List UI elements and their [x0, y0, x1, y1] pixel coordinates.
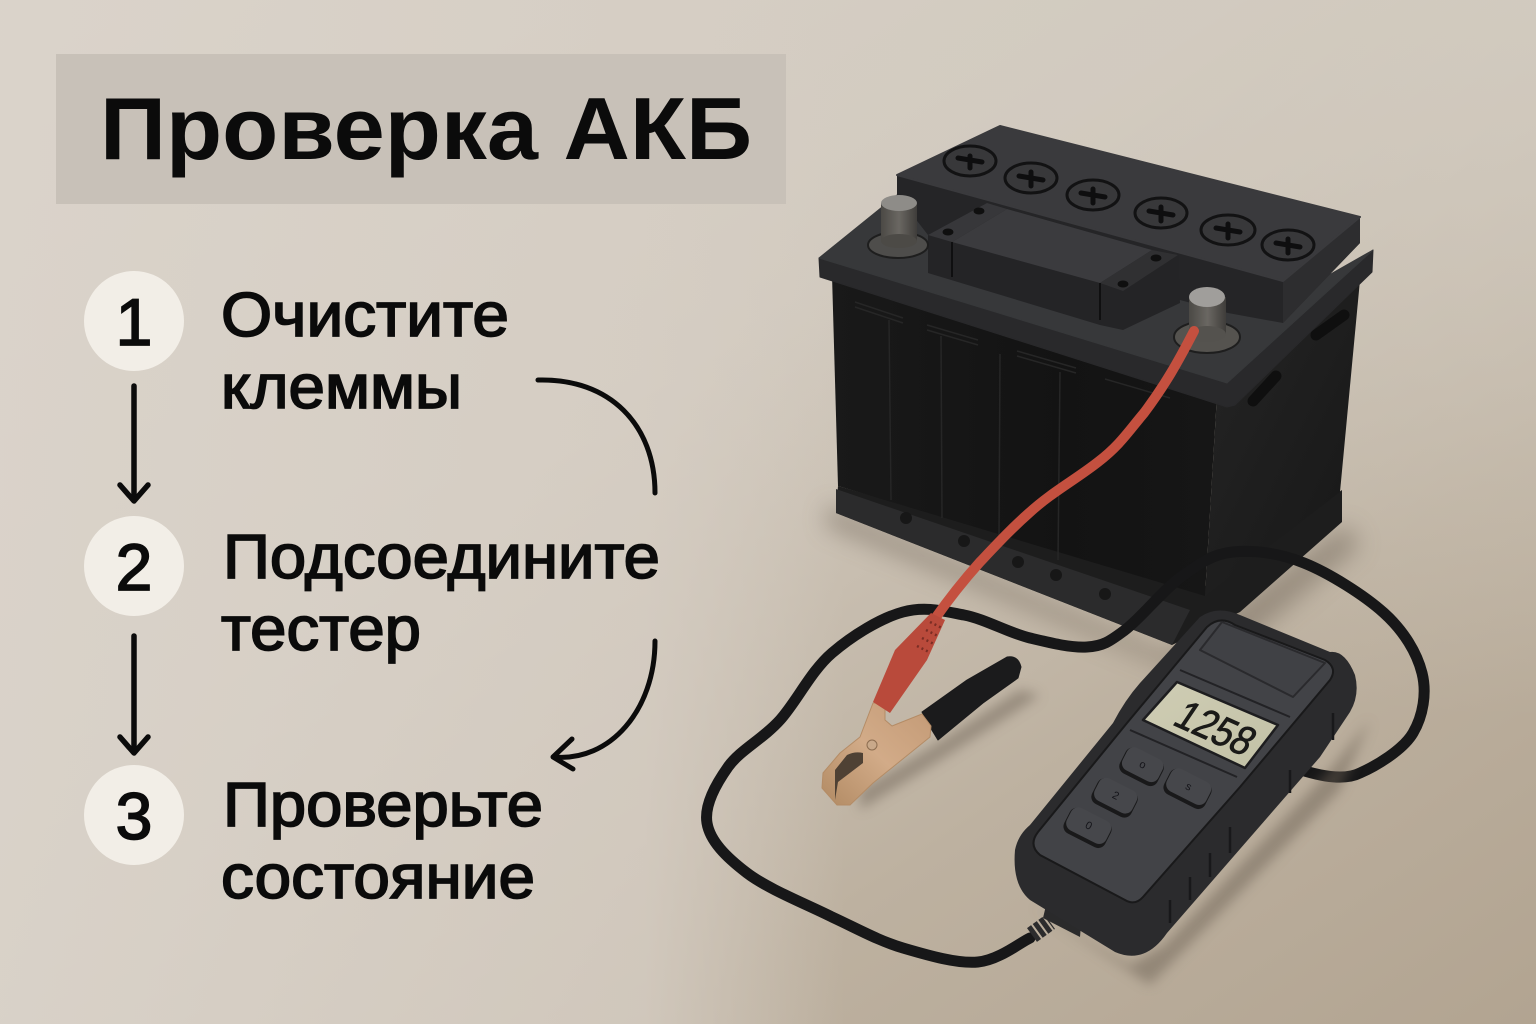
step 2 label: Подсоедините — [223, 523, 660, 592]
lower lid — [819, 195, 1373, 407]
clip shadow — [860, 690, 1040, 810]
button 4 — [1061, 804, 1115, 851]
button 2 — [1161, 765, 1215, 812]
arrow: step 1 to step 2 — [120, 386, 148, 501]
step 3 label: состояние — [221, 843, 535, 912]
LCD reading: 1258 — [1166, 692, 1265, 764]
black handle — [922, 657, 1021, 740]
jaw pivot — [867, 740, 877, 750]
title text: Проверка АКБ — [100, 79, 752, 178]
button 1: o — [1137, 758, 1148, 772]
grip ribs — [1170, 713, 1333, 923]
step 3 label: Проверьте — [223, 771, 543, 840]
digital tester — [1015, 610, 1370, 985]
LCD screen — [1143, 682, 1278, 768]
step 1 label: Очистите — [221, 281, 509, 350]
tester body — [1015, 610, 1357, 956]
crocodile clip — [822, 613, 1040, 810]
cable connector — [1032, 897, 1082, 937]
red boot — [873, 613, 945, 713]
button 4: 0 — [1083, 819, 1094, 833]
tester shadow — [1030, 720, 1370, 985]
step 3: 3 — [116, 779, 152, 853]
arrow: step 2 to step 3 — [120, 636, 148, 753]
step 2 — [84, 516, 660, 664]
bezel lines — [1130, 670, 1290, 777]
tester face — [1033, 620, 1333, 902]
battery shadow — [825, 505, 1360, 680]
step 1 — [84, 271, 509, 422]
step 2 label: тестер — [221, 595, 421, 664]
battery front wall — [832, 275, 1217, 596]
step 3 — [84, 765, 543, 912]
boot grip — [917, 622, 942, 652]
copper jaws — [822, 703, 931, 805]
red wire — [934, 331, 1194, 620]
left terminal post — [868, 195, 928, 258]
step 1: 1 — [116, 285, 152, 359]
battery — [819, 126, 1373, 680]
module box — [928, 203, 1180, 330]
button 2: s — [1183, 781, 1194, 794]
button 3 — [1089, 775, 1141, 820]
right terminal post — [1174, 287, 1240, 353]
cell ribs — [855, 302, 1170, 560]
title banner — [56, 54, 786, 204]
vent cap slots — [958, 156, 1300, 253]
vent caps — [944, 146, 1314, 260]
curved arrow: from step 2 to step 3 — [553, 641, 655, 769]
button 3: 2 — [1110, 789, 1121, 803]
battery base — [836, 486, 1342, 645]
black tester cable — [707, 551, 1424, 962]
battery side wall — [1205, 280, 1360, 596]
button 1 — [1116, 744, 1167, 789]
step 1 label: клеммы — [221, 353, 462, 422]
upper lid — [897, 126, 1360, 323]
step 2: 2 — [116, 530, 152, 604]
top recess — [1200, 622, 1325, 697]
side handle slots — [1253, 315, 1344, 401]
curved arrow: from step 1 towards step 2 — [538, 380, 655, 493]
jaw slot — [835, 752, 863, 800]
